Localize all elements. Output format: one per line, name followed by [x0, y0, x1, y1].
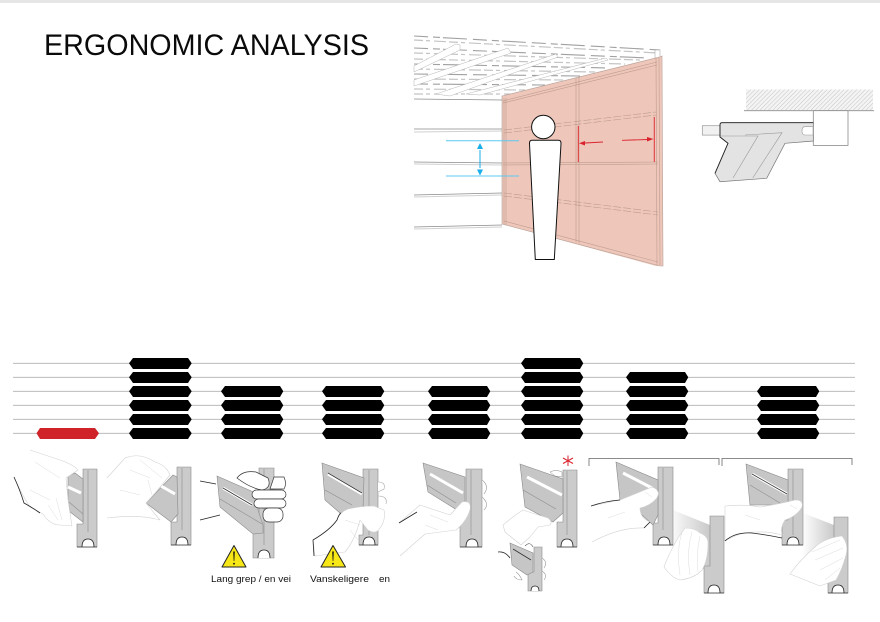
hand	[237, 472, 286, 522]
column 4	[322, 386, 384, 439]
hand	[107, 456, 170, 520]
hand 2	[664, 528, 708, 580]
grip 3	[200, 468, 286, 558]
caption: harder: en	[379, 574, 390, 585]
human figure	[530, 115, 561, 260]
grip 4	[313, 463, 386, 556]
hand	[503, 510, 551, 545]
column 7	[626, 372, 688, 439]
rating chart	[13, 358, 855, 439]
hand	[591, 487, 658, 542]
title: ERGONOMIC ANALYSIS	[44, 29, 369, 62]
column 5	[428, 386, 490, 439]
warning icon: harder	[321, 546, 346, 567]
grip 8	[725, 464, 848, 593]
grip 2	[107, 456, 191, 545]
blue height dimension	[446, 141, 519, 176]
tool side view on rail	[702, 90, 874, 182]
column 2	[129, 358, 192, 439]
caption: harder: Vanskeligere	[310, 574, 369, 585]
hand	[14, 450, 78, 526]
grip 5	[399, 463, 487, 556]
column 8	[757, 386, 819, 439]
hand	[399, 502, 470, 556]
bracket: two-step pair A	[589, 458, 719, 466]
column 1 red	[36, 428, 99, 439]
hand	[313, 506, 384, 556]
gun shaped tool body	[715, 123, 813, 182]
column 3	[221, 386, 283, 439]
left wall lines	[414, 129, 502, 229]
square bracket	[813, 111, 848, 145]
grip 7	[591, 462, 724, 593]
grip 6	[498, 456, 577, 591]
grip 1	[14, 450, 97, 547]
hatched ceiling block	[746, 90, 873, 110]
caption: long grip: Lang grep / en vei	[211, 574, 291, 585]
ceiling grid	[414, 36, 660, 100]
hand 2	[790, 536, 847, 586]
small tool	[528, 547, 542, 591]
red reach dimension	[578, 117, 654, 162]
warning icon: long grip	[222, 546, 246, 567]
caption: harder	[310, 574, 390, 585]
highlighted wall panel	[502, 56, 663, 266]
red star marker	[563, 456, 573, 466]
room illustration	[414, 36, 663, 266]
bracket: two-step pair B	[722, 458, 852, 466]
scale lines	[13, 363, 855, 433]
hand	[725, 500, 802, 541]
column 6	[521, 358, 583, 439]
stub	[702, 126, 720, 135]
